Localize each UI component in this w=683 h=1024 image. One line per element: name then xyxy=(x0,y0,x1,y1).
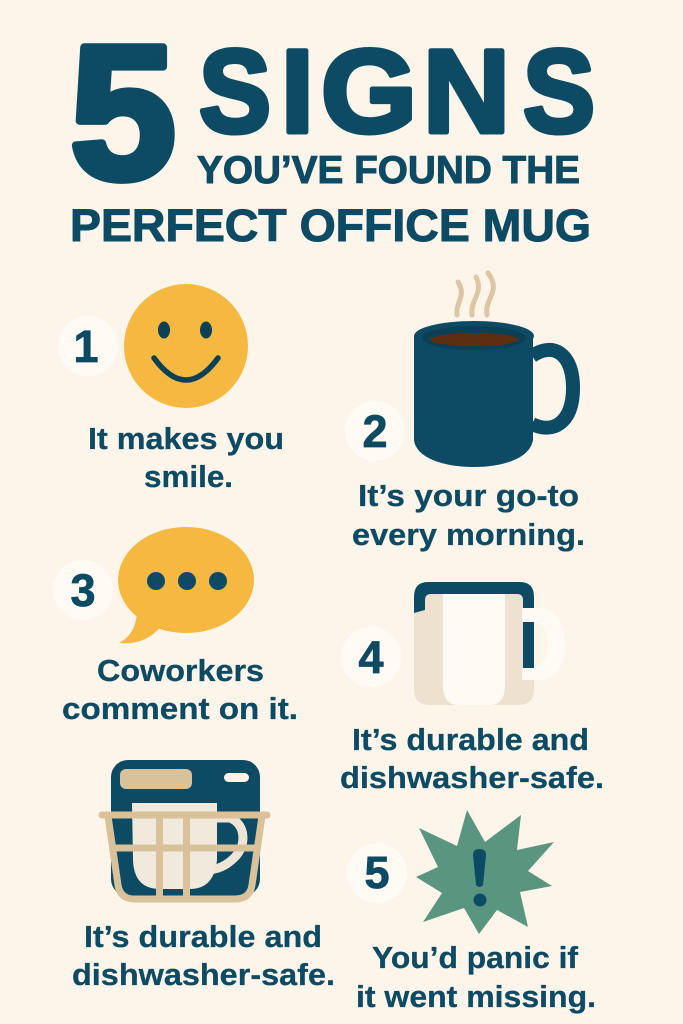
title xyxy=(70,7,595,251)
text: it's your go-to every morning: every morning. xyxy=(352,517,585,552)
text: it makes you smile: smile. xyxy=(144,459,233,494)
number badge 2 xyxy=(345,401,405,461)
sign 5 panel: dishwasher xyxy=(72,760,335,992)
title: SIGNS: S xyxy=(523,26,595,158)
title: SIGNS: G xyxy=(321,26,417,158)
number badge 1 xyxy=(58,316,118,376)
title: SIGNS xyxy=(199,26,595,158)
icon: durable mug xyxy=(414,582,565,705)
sign 3 panel xyxy=(53,527,298,726)
icon: mug in dishwasher basket xyxy=(102,760,267,899)
number badge 4: 4 xyxy=(358,632,384,683)
text: it makes you smile: It makes you xyxy=(88,421,284,456)
icon: speech bubble xyxy=(118,527,254,643)
text: coworkers comment on it xyxy=(62,653,298,726)
title: SIGNS: S xyxy=(199,26,271,158)
title: big 5: 5 xyxy=(70,7,176,219)
sign 6 panel: panic xyxy=(347,810,596,1014)
title: SIGNS: N xyxy=(423,26,510,158)
icon: smiley face xyxy=(124,284,248,408)
text: durable and dishwasher-safe: It’s durable and xyxy=(352,722,589,757)
text: durable and dishwasher-safe: dishwasher-safe. xyxy=(340,760,604,795)
title: SIGNS: I xyxy=(281,26,314,158)
text: durable and dishwasher-safe: dishwasher-safe. xyxy=(72,957,335,992)
text: it's your go-to every morning: It’s your go-to xyxy=(358,478,579,513)
number badge 3: 3 xyxy=(70,565,96,616)
text: it's your go-to every morning xyxy=(352,478,585,552)
number badge 1: 1 xyxy=(73,321,99,372)
number badge 4 xyxy=(341,627,401,687)
text: coworkers comment on it: comment on it. xyxy=(62,691,298,726)
sign 1 panel xyxy=(58,284,284,494)
text: durable and dishwasher-safe: It’s durable and xyxy=(84,919,322,954)
sign 2 panel xyxy=(345,273,585,552)
text: durable and dishwasher-safe xyxy=(340,722,604,795)
text: you'd panic if it went missing xyxy=(356,940,596,1014)
number badge 5: 5 xyxy=(364,847,390,898)
number badge 2: 2 xyxy=(362,406,388,457)
title: perfect office mug: PERFECT OFFICE MUG xyxy=(70,200,591,251)
title: you've found the: YOU’VE FOUND THE xyxy=(197,149,580,192)
text: it makes you smile xyxy=(88,421,284,494)
text: you'd panic if it went missing: it went missing. xyxy=(356,979,596,1014)
icon: starburst with exclamation xyxy=(416,810,554,934)
icon: coffee mug with steam xyxy=(414,273,573,467)
text: you'd panic if it went missing: You’d panic if xyxy=(372,940,579,975)
number badge 5 xyxy=(347,843,407,903)
number badge 3 xyxy=(53,560,113,620)
text: coworkers comment on it: Coworkers xyxy=(97,653,264,688)
sign 4 panel xyxy=(340,582,604,795)
text: durable and dishwasher-safe xyxy=(72,919,335,992)
